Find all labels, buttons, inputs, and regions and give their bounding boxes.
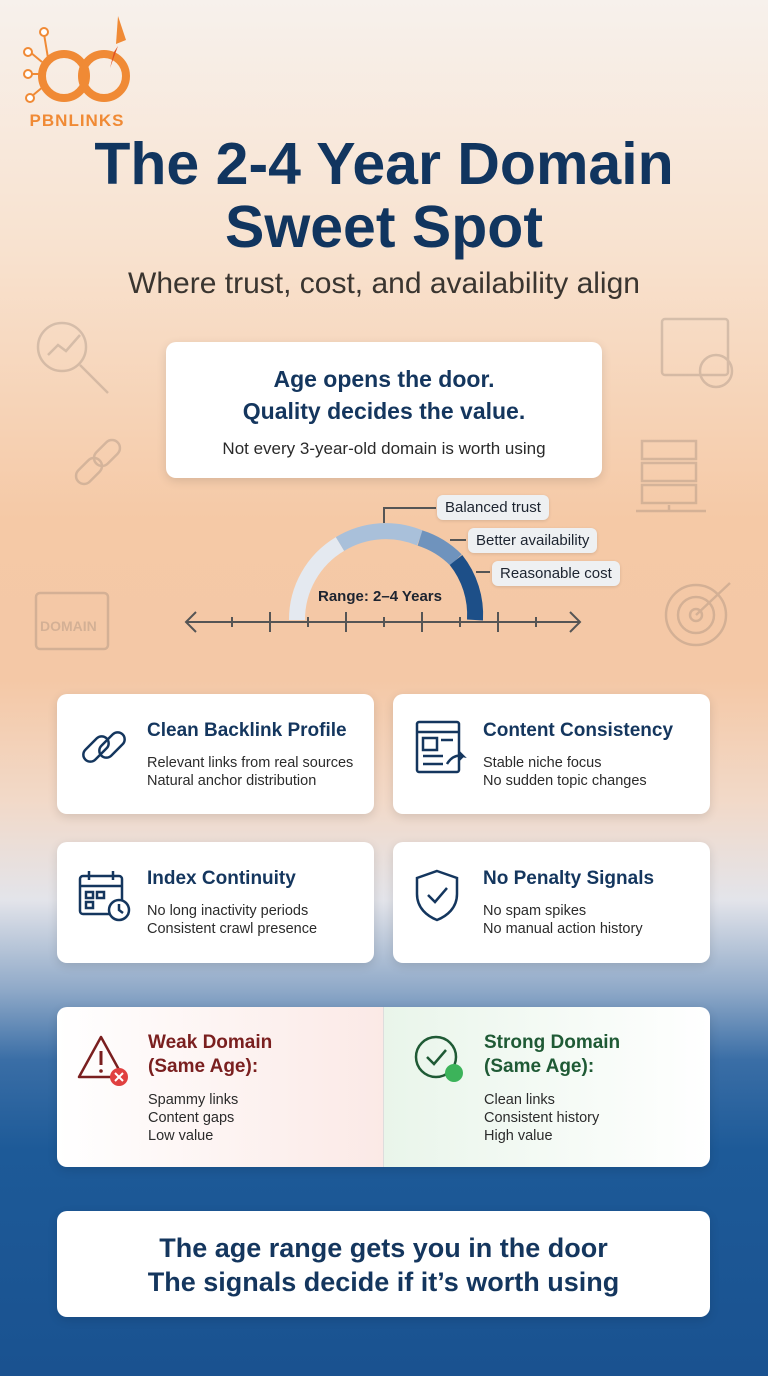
card: no penalty: No spam spikes xyxy=(483,903,586,919)
weak domain: Content gaps xyxy=(148,1110,234,1126)
strong domain: Consistent history xyxy=(484,1110,599,1126)
icon: link xyxy=(82,731,126,763)
strong domain: Clean links xyxy=(484,1092,555,1108)
callout card: Age opens the door. xyxy=(273,366,495,392)
comparison panel xyxy=(57,1007,710,1167)
card: clean backlink xyxy=(57,694,374,814)
label: better availability: Better availability xyxy=(476,532,589,549)
weak domain: Low value xyxy=(148,1128,213,1144)
conclusion card: The age range gets you in the door xyxy=(159,1233,608,1263)
decorative icons: DOMAIN xyxy=(40,618,97,634)
subtitle: Where trust, cost, and availability align xyxy=(128,267,640,300)
title: Sweet Spot xyxy=(225,194,543,260)
card: content consistency: No sudden topic changes xyxy=(483,773,647,789)
decorative icons xyxy=(34,318,734,650)
card: clean backlink: Natural anchor distribution xyxy=(147,773,316,789)
icon: check xyxy=(414,1036,463,1082)
card: no penalty: No manual action history xyxy=(483,921,643,937)
icon: shield xyxy=(416,870,458,922)
card: content consistency: Stable niche focus xyxy=(483,755,602,771)
label: reasonable cost xyxy=(492,561,620,586)
weak domain xyxy=(78,1032,272,1144)
label: balanced trust: Balanced trust xyxy=(445,499,541,516)
card: clean backlink: Clean Backlink Profile xyxy=(147,720,347,741)
card: no penalty: No Penalty Signals xyxy=(483,868,654,889)
card: content consistency xyxy=(393,694,710,814)
card: index continuity: No long inactivity periods xyxy=(147,903,308,919)
callout card: Quality decides the value. xyxy=(243,398,525,424)
weak domain: Weak Domain xyxy=(148,1032,272,1053)
card: index continuity: Index Continuity xyxy=(147,868,296,889)
conclusion card: The signals decide if it’s worth using xyxy=(148,1267,619,1297)
callout card xyxy=(166,342,602,478)
strong domain xyxy=(383,1007,710,1167)
title: The 2-4 Year Domain xyxy=(94,131,674,197)
weak domain: (Same Age): xyxy=(148,1056,258,1077)
logo xyxy=(23,16,130,130)
icon: document xyxy=(416,720,467,774)
label: better availability xyxy=(468,528,597,553)
card: clean backlink: Relevant links from real sources xyxy=(147,755,353,771)
conclusion card xyxy=(57,1211,710,1317)
strong domain: High value xyxy=(484,1128,553,1144)
card: no penalty xyxy=(393,842,710,963)
card: index continuity: Consistent crawl presence xyxy=(147,921,317,937)
label: balanced trust xyxy=(437,495,549,520)
strong domain: (Same Age): xyxy=(484,1056,594,1077)
weak domain: Spammy links xyxy=(148,1092,238,1108)
range chart: Range: 2–4 Years xyxy=(318,588,442,605)
card: content consistency: Content Consistency xyxy=(483,720,673,741)
callout card: Not every 3-year-old domain is worth using xyxy=(222,439,546,458)
icon: warning xyxy=(78,1036,128,1086)
range chart xyxy=(184,507,582,633)
label: reasonable cost: Reasonable cost xyxy=(500,565,612,582)
strong domain: Strong Domain xyxy=(484,1032,620,1053)
icon: calendar xyxy=(78,871,130,922)
title xyxy=(94,131,674,260)
card: index continuity xyxy=(57,842,374,963)
logo: PBNLINKS xyxy=(30,111,124,130)
